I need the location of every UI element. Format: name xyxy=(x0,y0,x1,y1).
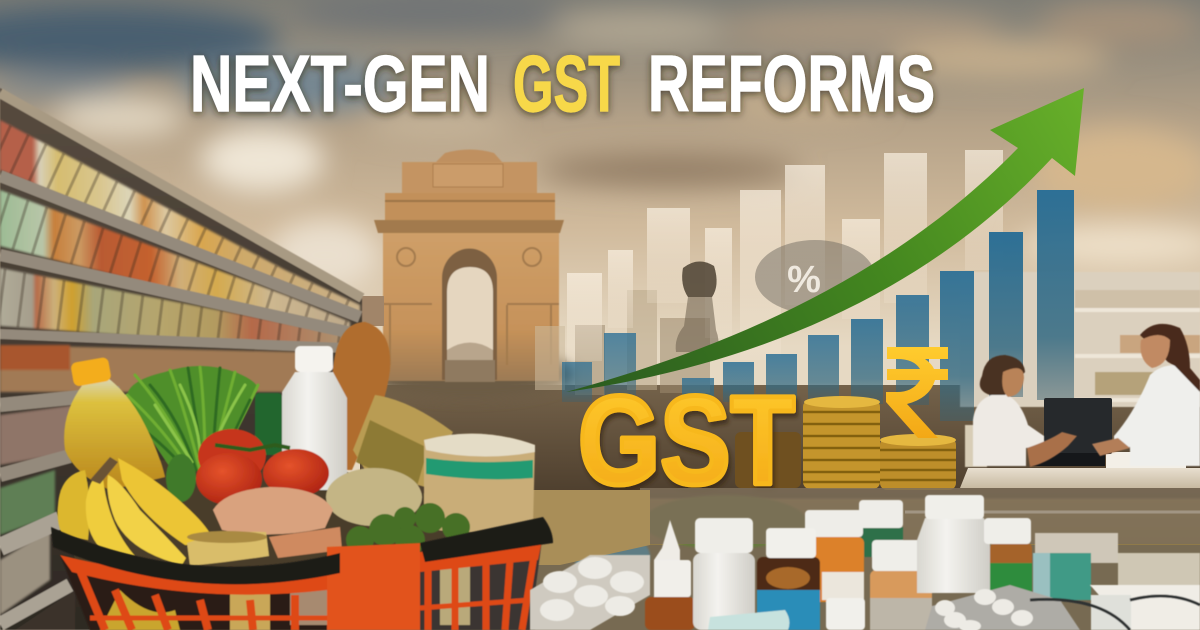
misty trees at base of monument xyxy=(365,348,575,400)
bread xyxy=(332,322,390,470)
grocery shelves xyxy=(0,88,362,630)
grocery basket xyxy=(51,517,553,630)
tomatoes xyxy=(196,429,329,505)
growth arrow xyxy=(566,88,1084,392)
basket handle right xyxy=(420,517,553,562)
bar chart xyxy=(562,150,1074,421)
coin stacks xyxy=(735,396,956,490)
teal tube xyxy=(708,610,789,630)
distant left building xyxy=(360,296,384,326)
ground band xyxy=(360,385,1200,545)
grass bunch xyxy=(127,366,258,470)
white bottle xyxy=(693,518,755,630)
lower backdrop xyxy=(530,545,1200,630)
broccoli xyxy=(346,503,470,555)
medicine bottles xyxy=(530,495,1200,630)
green bottle xyxy=(255,393,282,455)
left blister pack xyxy=(530,555,650,630)
mid ground foliage xyxy=(574,495,807,580)
title: GST xyxy=(513,39,620,128)
oil bottle xyxy=(64,357,165,490)
title: NEXT-GEN xyxy=(190,39,490,128)
laptop xyxy=(1030,398,1112,466)
product rows xyxy=(0,120,360,615)
pharmacist left xyxy=(965,355,1077,467)
counter xyxy=(640,452,1200,544)
table and paper xyxy=(1090,553,1200,630)
food can xyxy=(187,531,269,566)
grain packet xyxy=(353,395,453,487)
orange bottle xyxy=(805,510,864,602)
grocery produce xyxy=(58,322,535,630)
orange green bottle xyxy=(984,518,1032,593)
stethoscope xyxy=(1030,596,1200,630)
right blister pack xyxy=(925,585,1080,630)
dropper bottle xyxy=(645,520,695,630)
title xyxy=(190,39,935,128)
snack packet xyxy=(269,527,342,558)
meat packet xyxy=(213,487,333,535)
front amber bottle xyxy=(870,540,932,630)
India Gate monument xyxy=(374,150,564,382)
small white cap xyxy=(826,598,865,630)
box stack xyxy=(1033,533,1118,600)
GST 3D label: GST xyxy=(578,370,795,511)
rupee symbol xyxy=(886,347,948,438)
rice mound xyxy=(326,468,422,526)
city skyline silhouette xyxy=(535,290,710,395)
basket backdrop ground xyxy=(530,490,650,565)
bananas xyxy=(58,457,216,565)
produce shadow base xyxy=(60,460,535,630)
fist silhouette xyxy=(676,261,719,352)
brown and blue bottle xyxy=(757,528,820,630)
grain sack xyxy=(424,434,535,533)
title: REFORMS xyxy=(648,39,935,128)
basket handle left xyxy=(51,527,340,584)
green bottle xyxy=(859,500,903,557)
percent badge xyxy=(755,240,875,314)
pharmacist right xyxy=(1092,324,1200,466)
percent badge: % xyxy=(787,259,821,301)
milk bottle xyxy=(282,346,347,490)
large white bottle xyxy=(917,495,990,593)
pharmacy background shelves xyxy=(960,272,1200,407)
